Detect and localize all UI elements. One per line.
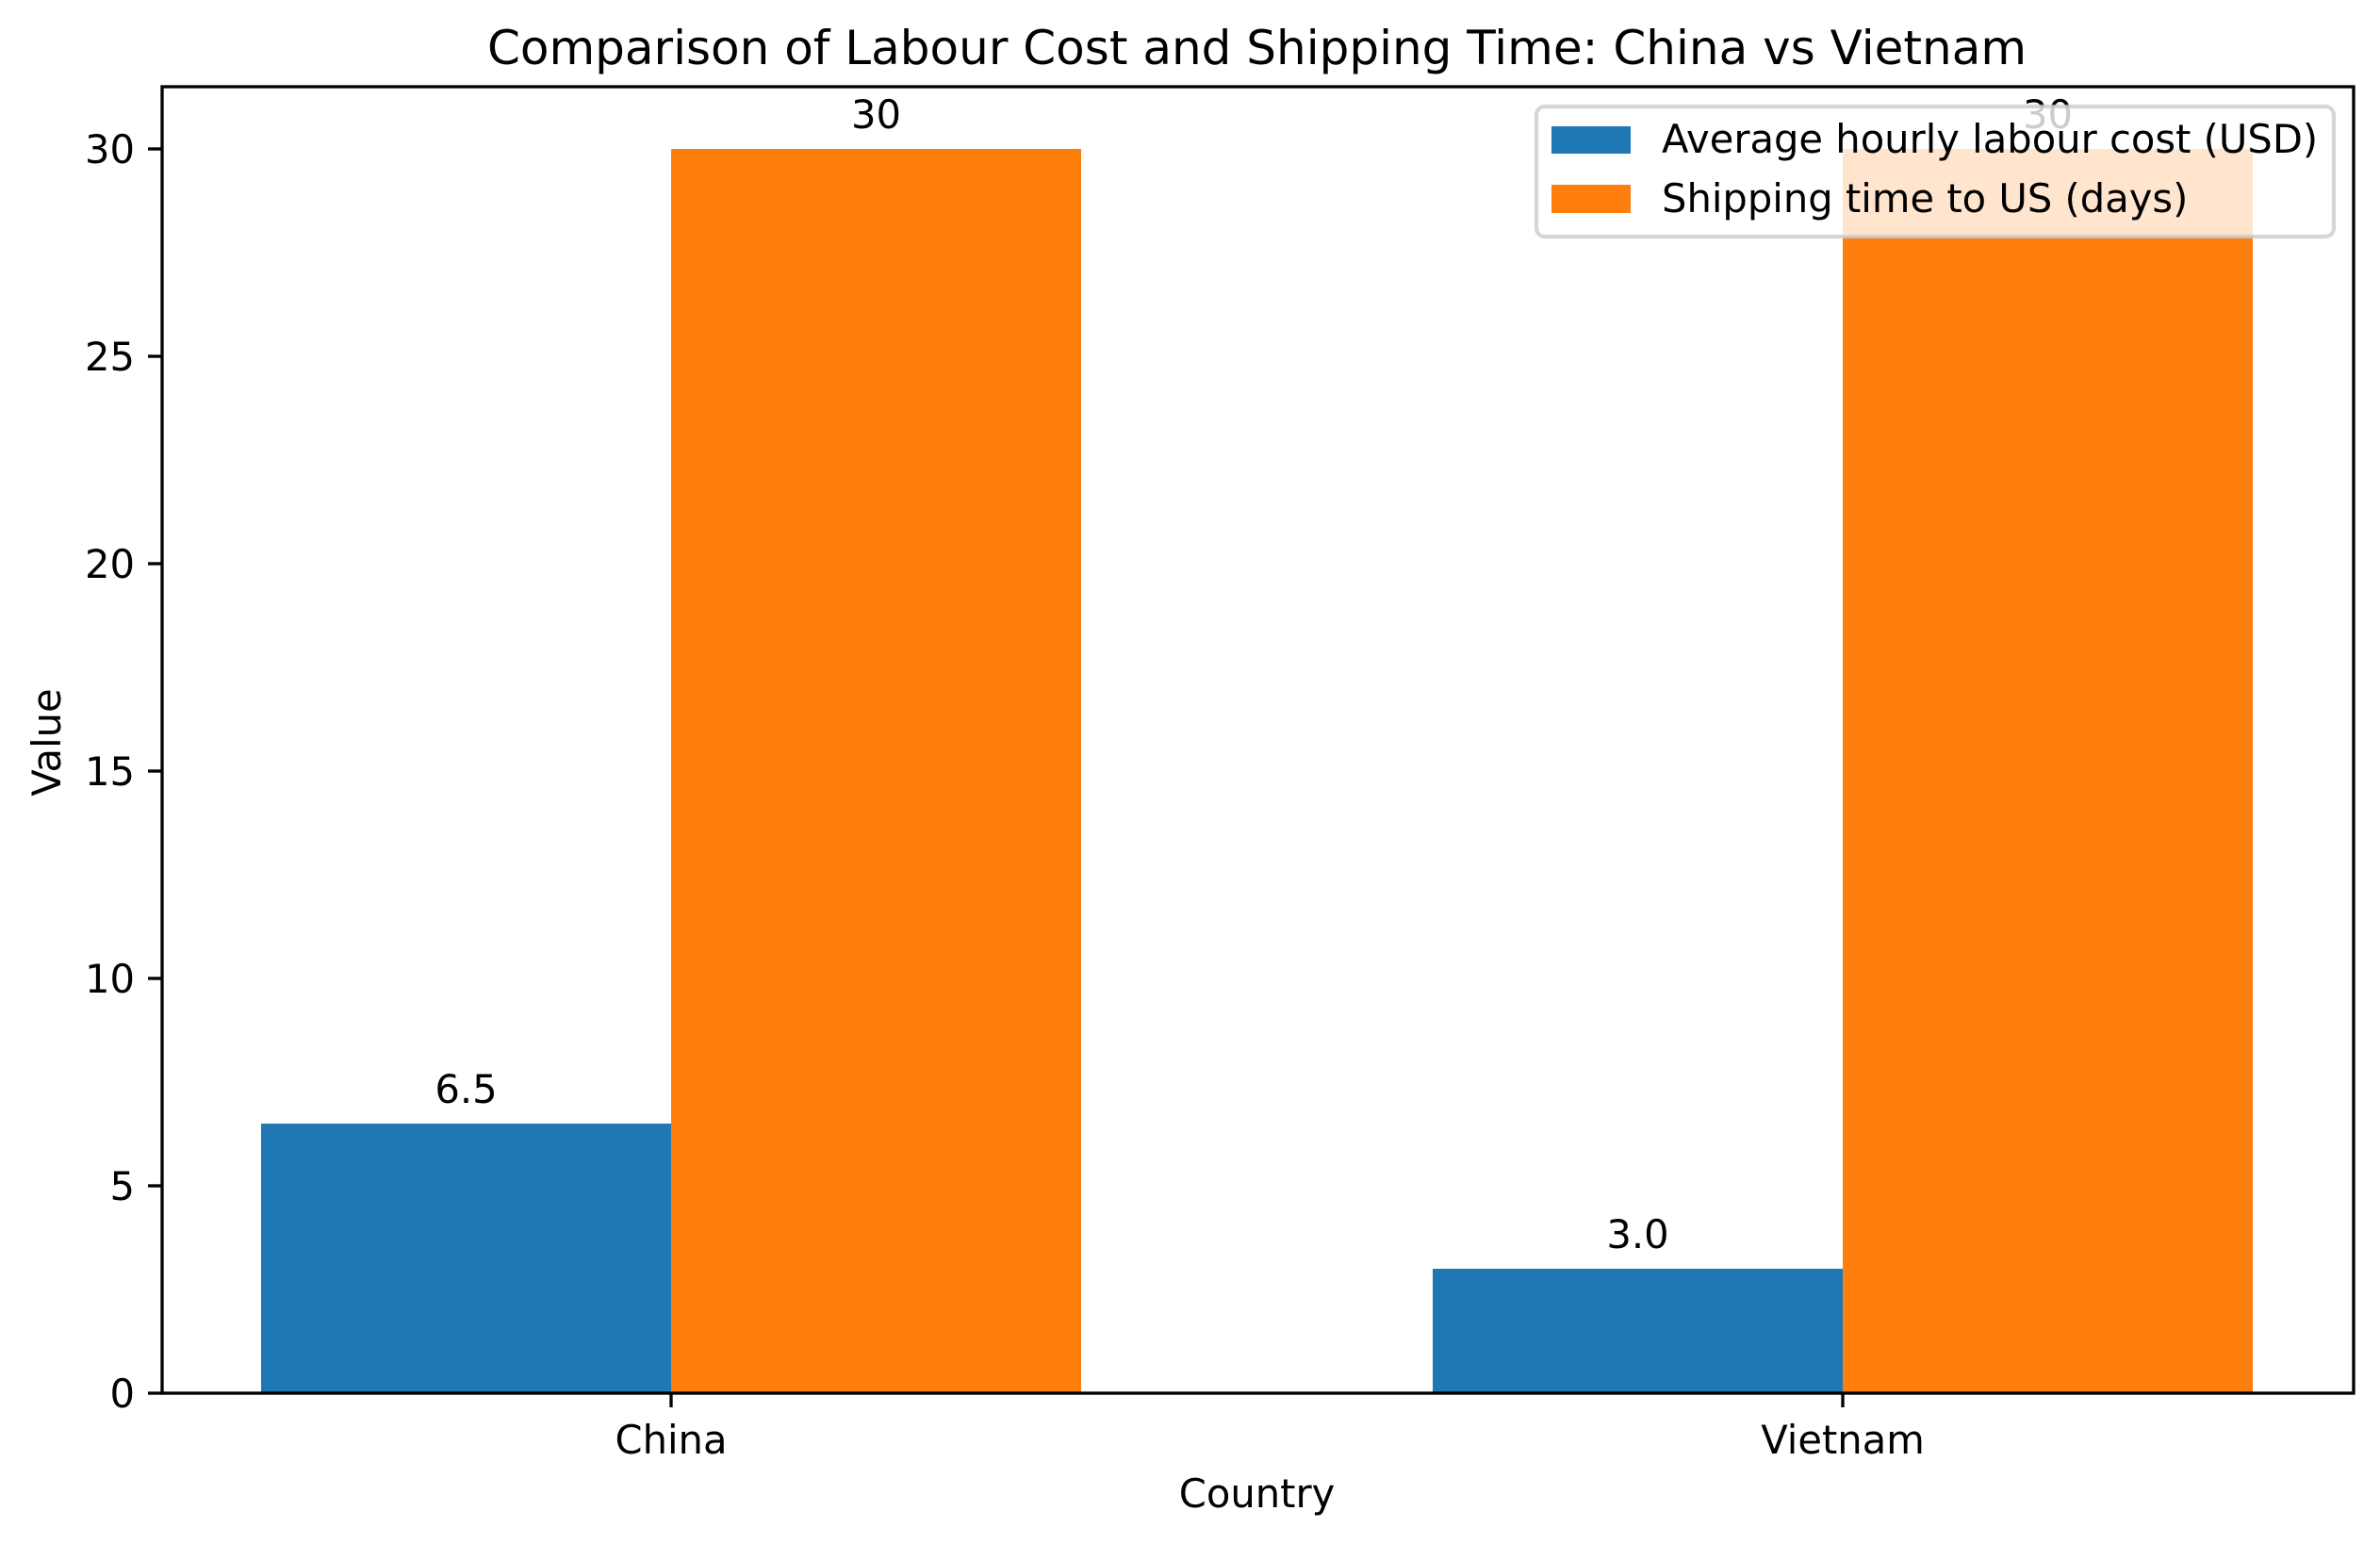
- y axis ticks and labels: 15: [85, 748, 135, 795]
- plot frame: [162, 87, 2354, 1393]
- x axis ticks and labels: [615, 1393, 1925, 1463]
- legend entry: average hourly labour cost: Average hourly labour cost (USD): [1662, 116, 2318, 162]
- x axis label: Country: [1179, 1470, 1335, 1517]
- bar value labels: 6.5: [435, 1066, 498, 1112]
- y axis label: Value: [24, 688, 70, 797]
- y axis ticks and labels: 25: [85, 334, 135, 380]
- y axis ticks and labels: 5: [109, 1163, 135, 1209]
- bars: shipping time to US: [671, 149, 2253, 1393]
- bars: average hourly labour cost: [261, 1124, 1843, 1393]
- bar value labels: 3.0: [1606, 1211, 1669, 1257]
- title: Comparison of Labour Cost and Shipping Time: China vs Vietnam: [487, 21, 2027, 75]
- legend entry: shipping time: Shipping time to US (days): [1662, 175, 2188, 222]
- legend: [1536, 107, 2334, 237]
- x axis ticks and labels: China: [615, 1417, 728, 1463]
- x axis ticks and labels: Vietnam: [1761, 1417, 1925, 1463]
- y axis ticks and labels: 10: [85, 956, 135, 1002]
- y axis ticks and labels: 0: [109, 1371, 135, 1417]
- y axis ticks and labels: [85, 126, 162, 1417]
- bar value labels: 30: [851, 91, 901, 138]
- bar value labels: 30: [2023, 91, 2073, 138]
- y axis ticks and labels: 20: [85, 541, 135, 587]
- y axis ticks and labels: 30: [85, 126, 135, 172]
- bar value labels: [435, 91, 2073, 1257]
